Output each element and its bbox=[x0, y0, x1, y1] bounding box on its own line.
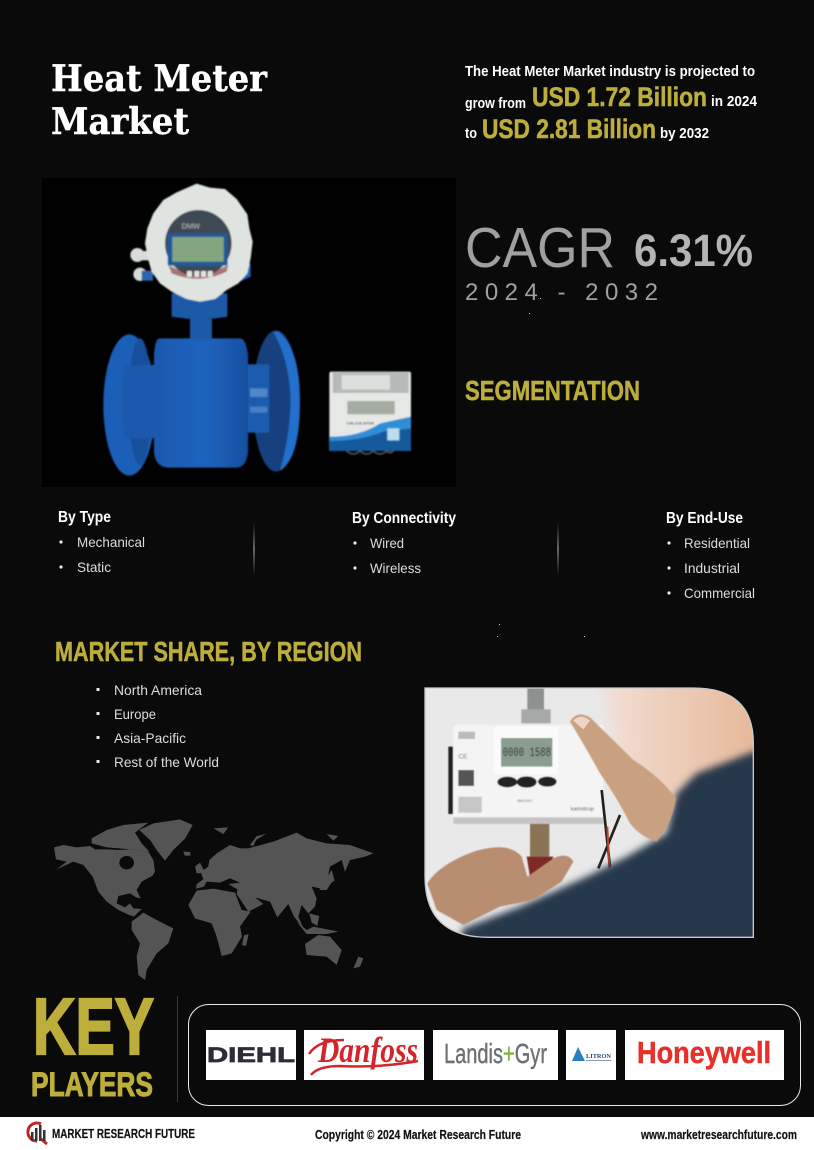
title bbox=[51, 58, 268, 143]
market forecast text: in 2024 bbox=[711, 93, 758, 110]
meter body: 0000 1588 bbox=[503, 746, 551, 761]
market forecast text: USD 1.72 Billion bbox=[532, 82, 707, 112]
region list: Rest of the World bbox=[114, 754, 219, 770]
cable glands bbox=[130, 248, 153, 281]
footer: MARKET RESEARCH FUTURE bbox=[52, 1126, 195, 1141]
meter body: kamstrup bbox=[571, 807, 594, 813]
small calculator bbox=[329, 372, 411, 454]
photo: technician fitting a meter bbox=[424, 687, 754, 938]
world map bbox=[54, 819, 373, 980]
photo: heat meters on black: DMW bbox=[182, 221, 200, 230]
panel: key player logos bbox=[188, 1004, 800, 1106]
title: Market bbox=[51, 101, 189, 143]
segment: by connectivity bbox=[352, 510, 456, 576]
heading: market share by region: MARKET SHARE, BY REGION bbox=[55, 636, 362, 667]
meter body bbox=[448, 725, 603, 824]
lower hand bbox=[427, 847, 573, 925]
logo: Landis+Gyr bbox=[433, 1030, 558, 1080]
logo: Honeywell bbox=[625, 1030, 784, 1080]
market forecast text: The Heat Meter Market industry is projected to bbox=[465, 63, 755, 80]
market forecast text: USD 2.81 Billion bbox=[482, 114, 656, 144]
region list bbox=[96, 682, 219, 770]
logo: Honeywell: Honeywell bbox=[637, 1035, 771, 1070]
CAGR: 6.31% bbox=[634, 225, 753, 276]
logo: Litron bbox=[566, 1030, 616, 1080]
logo: Danfoss bbox=[304, 1030, 424, 1080]
technician head blur bbox=[601, 688, 753, 832]
shirt blur bbox=[457, 747, 767, 947]
title: Heat Meter bbox=[51, 58, 268, 100]
meter body: 8501917 bbox=[517, 798, 534, 803]
market forecast text: grow from bbox=[465, 95, 526, 112]
segment: by connectivity: Wireless bbox=[370, 560, 421, 576]
region list: Asia-Pacific bbox=[114, 730, 186, 746]
logo: Litron: LITRON bbox=[586, 1053, 611, 1060]
segment: by type: Static bbox=[77, 559, 111, 575]
logo: Diehl bbox=[206, 1030, 296, 1080]
upper hand bbox=[570, 715, 676, 842]
icon: market research future logo bbox=[28, 1123, 47, 1144]
heading: segmentation: SEGMENTATION bbox=[465, 375, 640, 406]
heading: key players: KEY bbox=[33, 982, 154, 1071]
photo: heat meters on black bbox=[42, 178, 456, 487]
small calculator: CALCULATOR bbox=[347, 420, 374, 425]
meter body: CE bbox=[458, 753, 468, 760]
region list: North America bbox=[114, 682, 202, 698]
region list: Europe bbox=[114, 706, 156, 722]
market forecast text: by 2032 bbox=[660, 125, 709, 142]
logo: Diehl: DIEHL bbox=[207, 1044, 295, 1067]
pipe body bbox=[154, 338, 248, 468]
segment: by end-use: Residential bbox=[684, 535, 750, 551]
specks bbox=[497, 298, 585, 637]
right flange bbox=[247, 330, 300, 472]
pipe fitting bbox=[521, 688, 553, 877]
segment: by connectivity: Wired bbox=[370, 535, 404, 551]
CAGR bbox=[465, 216, 753, 306]
segment: by end-use bbox=[666, 510, 755, 601]
logo: Danfoss: Danfoss bbox=[317, 1030, 418, 1070]
left flange bbox=[103, 334, 157, 476]
segment: by end-use: Commercial bbox=[684, 585, 755, 601]
logo: Landis+Gyr: Landis+Gyr bbox=[444, 1038, 547, 1069]
segment: by end-use: By End-Use bbox=[666, 510, 743, 527]
segment: by end-use: Industrial bbox=[684, 560, 740, 576]
market forecast text: to bbox=[465, 125, 477, 142]
wires bbox=[598, 790, 620, 868]
segment: by type: By Type bbox=[58, 509, 111, 526]
segment: by type bbox=[58, 509, 145, 575]
meter head bbox=[145, 184, 253, 302]
heading: key players bbox=[31, 982, 154, 1104]
market forecast text bbox=[465, 63, 758, 144]
footer: Copyright © 2024 Market Research Future bbox=[315, 1127, 521, 1142]
footer bbox=[0, 1117, 814, 1150]
CAGR: 2024 - 2032 bbox=[465, 279, 658, 306]
segment: by type: Mechanical bbox=[77, 534, 145, 550]
segment: by connectivity: By Connectivity bbox=[352, 510, 456, 527]
heading: key players: PLAYERS bbox=[31, 1066, 153, 1104]
CAGR: CAGR bbox=[465, 216, 615, 280]
